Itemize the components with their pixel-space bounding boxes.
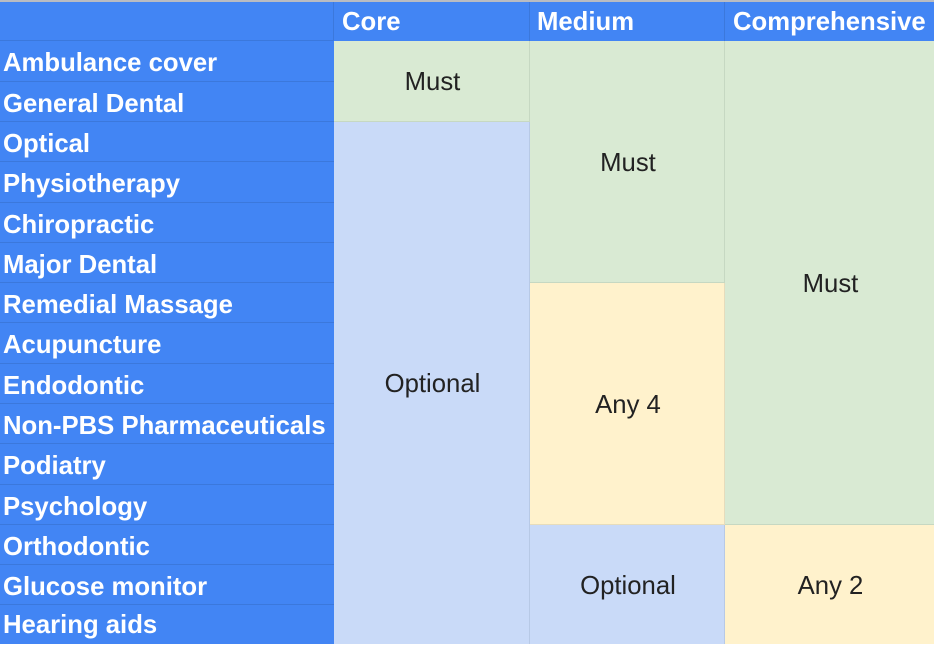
row label: Hearing aids: Hearing aids (3, 611, 157, 639)
row label: Remedial Massage (0, 283, 334, 323)
header: Medium: Medium (537, 8, 634, 36)
row label: Psychology (0, 485, 334, 525)
row label: Podiatry (0, 444, 334, 485)
row label: Podiatry: Podiatry (3, 452, 106, 480)
cell: Comprehensive Any 2: Any 2 (798, 572, 863, 600)
cell: Medium Optional (530, 525, 725, 644)
row label: Optical: Optical (3, 130, 90, 158)
header: Comprehensive (725, 2, 934, 41)
row label: Physiotherapy: Physiotherapy (3, 170, 180, 198)
header: Comprehensive: Comprehensive (733, 8, 926, 36)
cell: Comprehensive Must: Must (803, 270, 858, 298)
header: Medium (530, 2, 725, 41)
cell: Medium Any 4 (530, 283, 725, 525)
row label: Physiotherapy (0, 162, 334, 203)
row label: Glucose monitor (0, 565, 334, 605)
row label: Orthodontic (0, 525, 334, 565)
row label: Major Dental: Major Dental (3, 251, 157, 279)
row label: Psychology: Psychology (3, 493, 147, 521)
top border (0, 0, 934, 2)
row label: Hearing aids (0, 605, 334, 644)
cell: Medium Must (530, 41, 725, 283)
row label: General Dental: General Dental (3, 90, 184, 118)
header: Core: Core (342, 8, 401, 36)
row label: Non-PBS Pharmaceuticals: Non-PBS Pharmaceuticals (3, 412, 326, 440)
cell: Core Optional (334, 122, 530, 644)
cell: Medium Any 4: Any 4 (595, 390, 661, 418)
row label: Glucose monitor: Glucose monitor (3, 573, 207, 601)
row label: Optical (0, 122, 334, 162)
header: blank corner (0, 2, 334, 41)
cell: Core Must: Must (405, 68, 460, 96)
row label: Ambulance cover: Ambulance cover (3, 49, 217, 77)
cell: Core Optional: Optional (385, 370, 480, 398)
cell: Medium Optional: Optional (580, 572, 676, 600)
row label: Acupuncture (0, 323, 334, 364)
cell: Comprehensive Must (725, 41, 934, 525)
row label: Ambulance cover (0, 41, 334, 82)
header: Core (334, 2, 530, 41)
row label: Chiropractic (0, 203, 334, 243)
row label: Endodontic (0, 364, 334, 404)
cell: Comprehensive Any 2 (725, 525, 934, 644)
row label: Orthodontic: Orthodontic (3, 533, 150, 561)
row label: Major Dental (0, 243, 334, 283)
row label: General Dental (0, 82, 334, 122)
row label: Chiropractic: Chiropractic (3, 211, 154, 239)
row label: Acupuncture: Acupuncture (3, 331, 161, 359)
cell: Medium Must: Must (600, 148, 656, 176)
cell: Core Must (334, 41, 530, 122)
row label: Non-PBS Pharmaceuticals (0, 404, 334, 444)
row label: Endodontic: Endodontic (3, 372, 144, 400)
row label: Remedial Massage: Remedial Massage (3, 291, 233, 319)
